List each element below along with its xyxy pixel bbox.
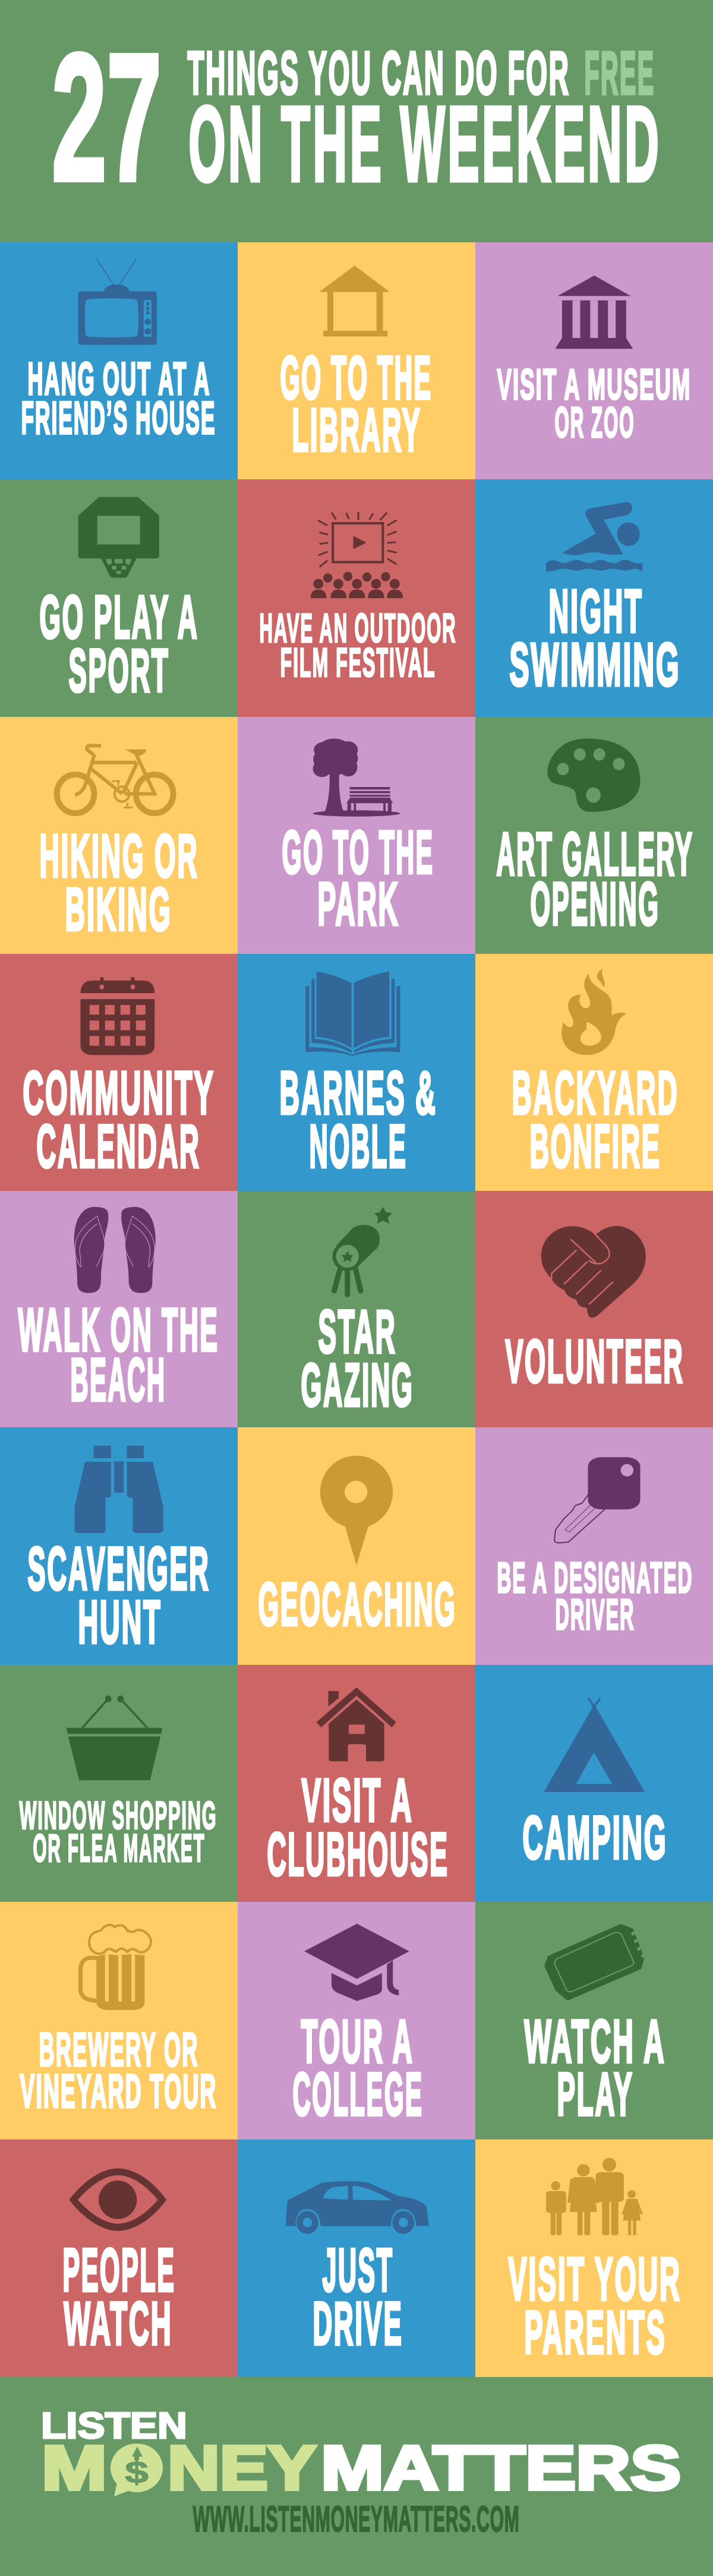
text: WALK ON THE (18, 1296, 219, 1364)
panel: hang out at a friend's house (0, 242, 238, 479)
panel: scavenger hunt: SCAVENGER (27, 1535, 210, 1603)
panel: just drive: DRIVE (313, 2290, 403, 2357)
label: STAR (318, 1298, 397, 1366)
label (301, 1298, 414, 1419)
panel: art gallery opening (475, 717, 713, 954)
label (19, 1793, 217, 1870)
text: GEOCACHING (258, 1570, 456, 1638)
label: FILM FESTIVAL (280, 640, 436, 685)
icon: flip flops (74, 1207, 156, 1293)
label (497, 1554, 693, 1639)
panel: just drive (238, 2139, 475, 2377)
label (20, 2023, 217, 2117)
label (524, 2008, 665, 2128)
label (259, 605, 456, 685)
panel: hang out at a friend's house: FRIEND’S HOUSE (21, 393, 216, 444)
panel: scavenger hunt (0, 1427, 238, 1665)
icon: swimmer (546, 502, 642, 571)
icon: calendar (80, 977, 154, 1055)
icon: map pin (320, 1456, 393, 1565)
panel: go to the park (238, 717, 475, 954)
icon: speech bubble with dollar sign: $ (125, 2455, 149, 2490)
icon: library (319, 265, 390, 336)
panel: barnes and noble (238, 954, 475, 1191)
label: BREWERY OR (39, 2023, 198, 2076)
panel: night swimming (475, 479, 713, 717)
footer logo: listen money matters: O (112, 2433, 162, 2503)
panel: brewery or vineyard tour (0, 1902, 238, 2139)
icon: heart hand (541, 1226, 646, 1318)
footer logo: listen money matters: LISTEN (41, 2406, 187, 2447)
panel: volunteer (475, 1191, 713, 1427)
title (52, 16, 662, 219)
icon: graduation cap (304, 1924, 409, 2001)
label: PARK (317, 870, 399, 938)
panel: people watch (0, 2139, 238, 2377)
label (27, 1535, 210, 1656)
text: CLUBHOUSE (267, 1820, 449, 1888)
panel: backyard bonfire (475, 954, 713, 1191)
panel: community calendar: COMMUNITY (23, 1059, 215, 1127)
panel: go to the library: GO TO THE (280, 344, 433, 412)
panel: have an outdoor film festival (238, 479, 475, 717)
panel: community calendar (0, 954, 238, 1191)
panel: visit a museum or zoo (475, 242, 713, 479)
label (280, 344, 433, 464)
icon: car (286, 2181, 429, 2234)
panel: hang out at a friend's house: HANG OUT AT A (27, 353, 210, 404)
panel: go to the library: LIBRARY (292, 396, 422, 464)
panel: barnes and noble: BARNES & (279, 1059, 437, 1127)
label (21, 353, 216, 444)
label (292, 2008, 423, 2128)
panel: people watch: PEOPLE (63, 2236, 176, 2304)
label: HUNT (78, 1588, 162, 1656)
icon: basket (67, 1695, 162, 1780)
panel: tour a college: COLLEGE (292, 2060, 423, 2128)
panel: star gazing (238, 1191, 475, 1427)
panel: tour a college: TOUR A (301, 2008, 414, 2075)
footer logo: listen money matters: MATTERS (321, 2433, 681, 2503)
panel: geocaching (238, 1427, 475, 1665)
panel: be a designated driver (475, 1427, 713, 1665)
label (267, 1766, 449, 1888)
label (282, 818, 434, 938)
label (512, 1059, 679, 1180)
label: BIKING (65, 875, 172, 943)
icon: flame (561, 968, 627, 1055)
panel: star gazing: GAZING (301, 1351, 414, 1419)
label (18, 1296, 219, 1414)
icon: bicycle (57, 745, 173, 813)
panel: camping (475, 1665, 713, 1902)
panel: go play a sport (0, 479, 238, 717)
label (510, 577, 681, 698)
panel: window shopping or flea market: OR FLEA MARKET (33, 1826, 206, 1870)
label: SPORT (69, 637, 170, 704)
label (63, 2236, 176, 2357)
panel: go play a sport: GO PLAY A (39, 583, 198, 651)
panel: visit your parents (475, 2139, 713, 2377)
label: VISIT A (302, 1766, 414, 1834)
panel: go to the park: GO TO THE (282, 818, 434, 886)
footer logo: listen money matters: NEY (168, 2433, 316, 2503)
panel: visit a clubhouse (238, 1665, 475, 1902)
icon: palette (547, 738, 641, 812)
icon: eye (69, 2169, 166, 2231)
panel: window shopping or flea market: WINDOW SHOPPING (19, 1793, 217, 1837)
label: BEACH (70, 1346, 166, 1414)
icon: open book (305, 972, 400, 1056)
icon: family (546, 2158, 642, 2235)
panel: hiking or biking (0, 717, 238, 954)
label (23, 1059, 215, 1180)
icon: tree and bench (313, 738, 400, 817)
icon: television (78, 259, 157, 344)
icon: binoculars (75, 1446, 163, 1533)
text: HAVE AN OUTDOOR (259, 605, 456, 651)
footer logo: listen money matters: M (42, 2433, 107, 2503)
label (313, 2236, 403, 2357)
panel: tour a college (238, 1902, 475, 2139)
icon: outdoor cinema (311, 513, 403, 598)
panel: just drive: JUST (322, 2236, 393, 2304)
panel: people watch: WATCH (64, 2290, 172, 2357)
icon: speech bubble with dollar sign (111, 2444, 163, 2496)
icon: telescope (332, 1207, 392, 1294)
panel: go to the library (238, 242, 475, 479)
icon: basketball hoop (78, 497, 159, 578)
panel: watch a play (475, 1902, 713, 2139)
icon: car key (554, 1457, 641, 1543)
panel: walk on the beach (0, 1191, 238, 1427)
panel: community calendar: CALENDAR (37, 1112, 201, 1180)
panel: window shopping or flea market (0, 1665, 238, 1902)
label (39, 583, 198, 704)
icon: beer mug (80, 1925, 151, 2010)
panel: brewery or vineyard tour: VINEYARD TOUR (20, 2065, 217, 2117)
panel: hiking or biking: HIKING OR (39, 822, 198, 890)
label (39, 822, 198, 943)
title: 27 (52, 16, 162, 219)
label (279, 1059, 437, 1180)
icon: house (317, 1687, 396, 1761)
icon: ticket (542, 1924, 645, 2000)
label (509, 2245, 681, 2366)
label (497, 820, 694, 938)
label (497, 361, 692, 447)
label: NOBLE (309, 1112, 408, 1180)
icon: tent (544, 1698, 645, 1792)
icon: museum (555, 276, 633, 349)
footer logo: listen money matters (41, 2406, 681, 2503)
